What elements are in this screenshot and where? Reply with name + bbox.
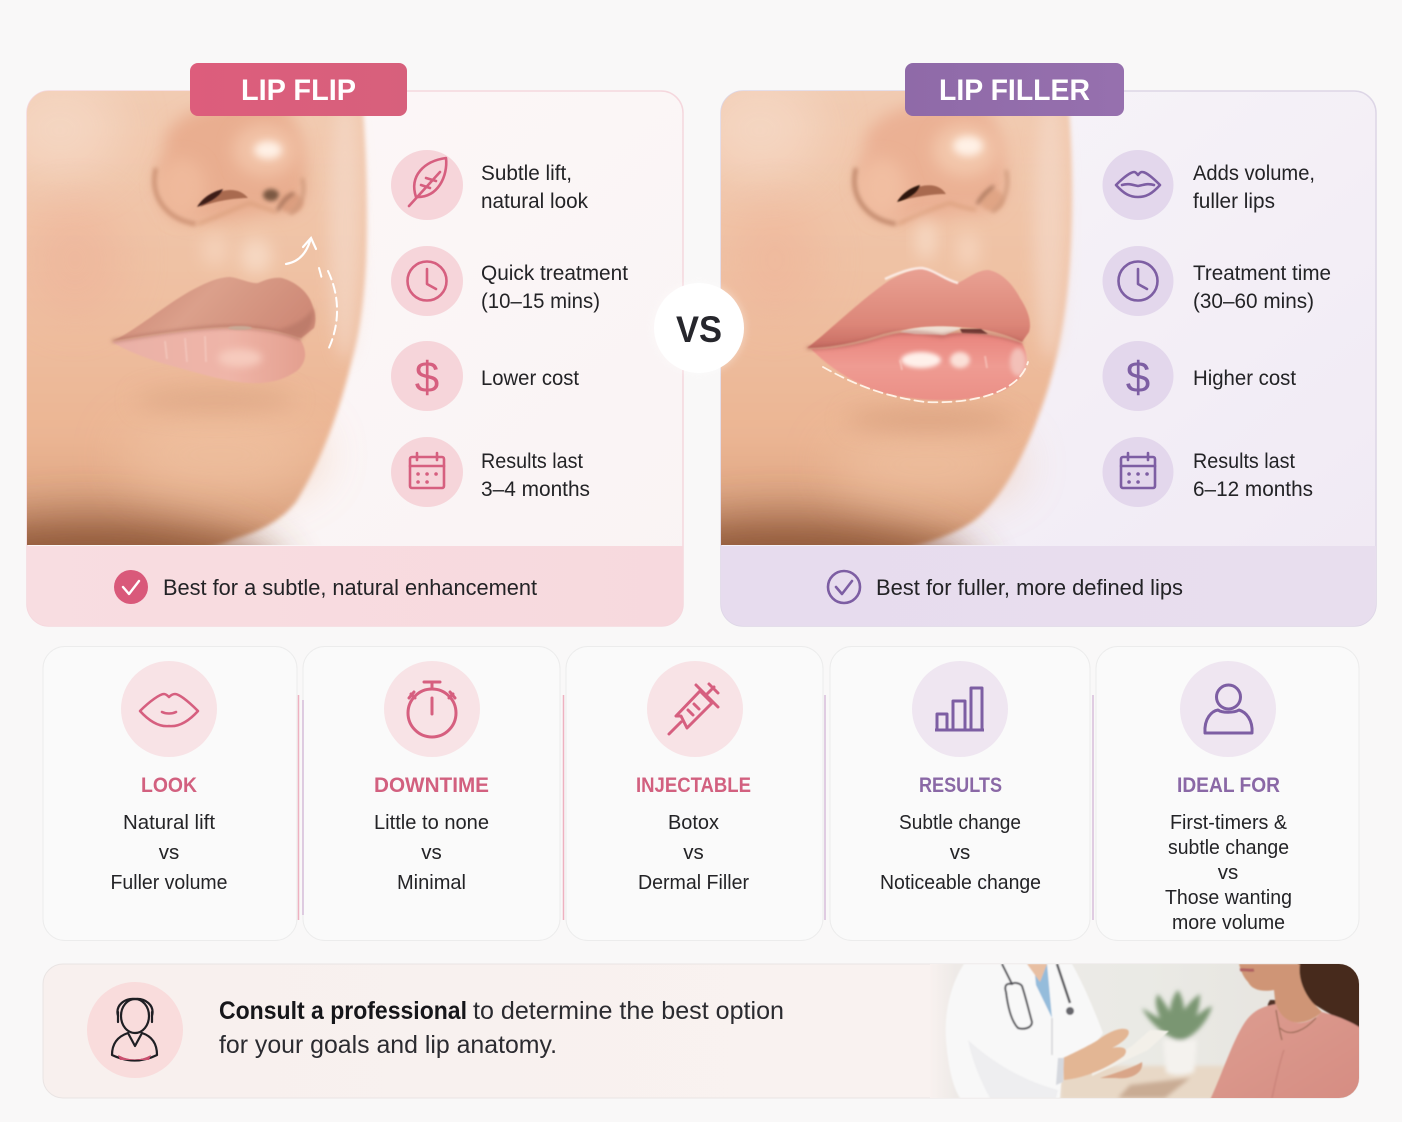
icon: clock bbox=[391, 246, 463, 316]
text: subtle lift: Subtle lift, bbox=[481, 162, 572, 185]
text: ideal compare: Those wanting bbox=[1165, 886, 1292, 909]
text: best for flip: Best for a subtle, natural enhancement bbox=[163, 575, 537, 600]
text: look compare: vs bbox=[159, 841, 179, 864]
icon: stopwatch bbox=[384, 661, 480, 757]
icon: clock bbox=[1102, 246, 1174, 316]
text: subtle lift bbox=[481, 162, 588, 213]
card: look bbox=[43, 646, 297, 940]
icon: lips bbox=[1102, 150, 1174, 220]
photo: natural lips face bbox=[27, 91, 370, 545]
nose bbox=[154, 100, 306, 274]
heading: ideal for: IDEAL FOR bbox=[1177, 774, 1280, 797]
heading: results: RESULTS bbox=[919, 774, 1002, 797]
title tag: lip flip bbox=[190, 63, 407, 116]
dashed outline: added volume bbox=[823, 362, 1028, 402]
heading: downtime: DOWNTIME bbox=[374, 774, 489, 797]
photo: doctor and patient bbox=[930, 960, 1364, 1100]
card: results bbox=[830, 646, 1090, 940]
text: consult message: for your goals and lip anatomy. bbox=[219, 1031, 557, 1059]
photo: fuller lips face bbox=[721, 91, 1075, 545]
lips: filler bbox=[807, 268, 1030, 400]
icon: syringe bbox=[647, 661, 743, 757]
text: ideal compare: First-timers & bbox=[1170, 811, 1287, 834]
text: adds volume: fuller lips bbox=[1193, 190, 1275, 213]
text: higher cost: Higher cost bbox=[1193, 367, 1296, 390]
icon: feather bbox=[391, 150, 463, 220]
icon: lips bbox=[121, 661, 217, 757]
text: results flip: Results last bbox=[481, 450, 583, 473]
lips: natural bbox=[112, 277, 315, 383]
bottom band: lip flip bbox=[27, 546, 683, 626]
text: consult message: to determine the best option bbox=[473, 997, 784, 1025]
doctor bbox=[946, 964, 1103, 1098]
icon: check bbox=[828, 571, 860, 603]
text: consult message: Consult a professional bbox=[219, 997, 467, 1025]
consult banner bbox=[43, 960, 1364, 1100]
text: injectable compare: vs bbox=[683, 841, 704, 864]
arrow: lift indicator bbox=[286, 238, 337, 350]
icon: bars bbox=[912, 661, 1008, 757]
text: results flip: 3–4 months bbox=[481, 478, 590, 501]
vs badge: VS bbox=[676, 309, 722, 350]
text: adds volume: Adds volume, bbox=[1193, 162, 1315, 185]
text: results compare bbox=[880, 811, 1041, 894]
text: results filler bbox=[1193, 450, 1313, 501]
card: injectable bbox=[566, 646, 823, 940]
text: results filler: Results last bbox=[1193, 450, 1295, 473]
text: treatment time: (30–60 mins) bbox=[1193, 290, 1314, 313]
card: ideal for bbox=[1096, 646, 1359, 940]
text: results filler: 6–12 months bbox=[1193, 478, 1313, 501]
heading: injectable: INJECTABLE bbox=[636, 774, 751, 797]
text: ideal compare: vs bbox=[1218, 861, 1238, 884]
text: results compare: Noticeable change bbox=[880, 871, 1041, 894]
text: injectable compare: Dermal Filler bbox=[638, 871, 749, 894]
heading: look: LOOK bbox=[141, 774, 197, 797]
icon: dollar: $ bbox=[415, 353, 439, 402]
title tag: lip filler: LIP FILLER bbox=[939, 74, 1090, 107]
vs badge bbox=[653, 282, 745, 374]
text: results compare: vs bbox=[950, 841, 970, 864]
text: results flip bbox=[481, 450, 590, 501]
icon: dollar bbox=[391, 341, 463, 411]
text: quick treatment: (10–15 mins) bbox=[481, 290, 600, 313]
icon: person bbox=[1180, 661, 1276, 757]
text: injectable compare: Botox bbox=[668, 811, 720, 834]
text: adds volume bbox=[1193, 162, 1315, 213]
icon: calendar bbox=[391, 437, 463, 507]
text: downtime compare: Minimal bbox=[397, 871, 466, 894]
text: downtime compare: vs bbox=[421, 841, 442, 864]
text: subtle lift: natural look bbox=[481, 190, 588, 213]
icon: check bbox=[114, 570, 148, 604]
title tag: lip filler bbox=[905, 63, 1124, 116]
text: ideal compare: subtle change bbox=[1168, 836, 1289, 859]
panel: lip filler bbox=[720, 63, 1377, 627]
text: look compare: Fuller volume bbox=[110, 871, 228, 894]
paper and hands bbox=[1056, 1029, 1169, 1085]
text: treatment time: Treatment time bbox=[1193, 262, 1331, 285]
text: best for filler: Best for fuller, more defined lips bbox=[876, 575, 1183, 600]
icon: dollar bbox=[1102, 341, 1174, 411]
nose bbox=[854, 100, 1007, 268]
card: downtime bbox=[303, 646, 560, 940]
text: look compare: Natural lift bbox=[123, 811, 215, 834]
text: injectable compare bbox=[638, 811, 749, 894]
text: results compare: Subtle change bbox=[899, 811, 1021, 834]
icon: doctor bbox=[87, 982, 183, 1078]
text: ideal compare bbox=[1165, 811, 1292, 934]
text: consult message bbox=[219, 997, 784, 1059]
text: look compare bbox=[110, 811, 228, 894]
text: ideal compare: more volume bbox=[1172, 911, 1285, 934]
icon: calendar bbox=[1102, 437, 1174, 507]
text: lower cost: Lower cost bbox=[481, 367, 579, 390]
panel: lip flip bbox=[0, 63, 683, 642]
text: treatment time bbox=[1193, 262, 1331, 313]
icon: dollar: $ bbox=[1126, 353, 1150, 402]
text: quick treatment: Quick treatment bbox=[481, 262, 628, 285]
patient bbox=[1210, 960, 1364, 1100]
title tag: lip flip: LIP FLIP bbox=[241, 74, 356, 107]
text: downtime compare: Little to none bbox=[374, 811, 489, 834]
text: downtime compare bbox=[374, 811, 489, 894]
bottom band: lip filler bbox=[721, 546, 1376, 626]
text: quick treatment bbox=[481, 262, 628, 313]
plant bbox=[1142, 990, 1212, 1075]
